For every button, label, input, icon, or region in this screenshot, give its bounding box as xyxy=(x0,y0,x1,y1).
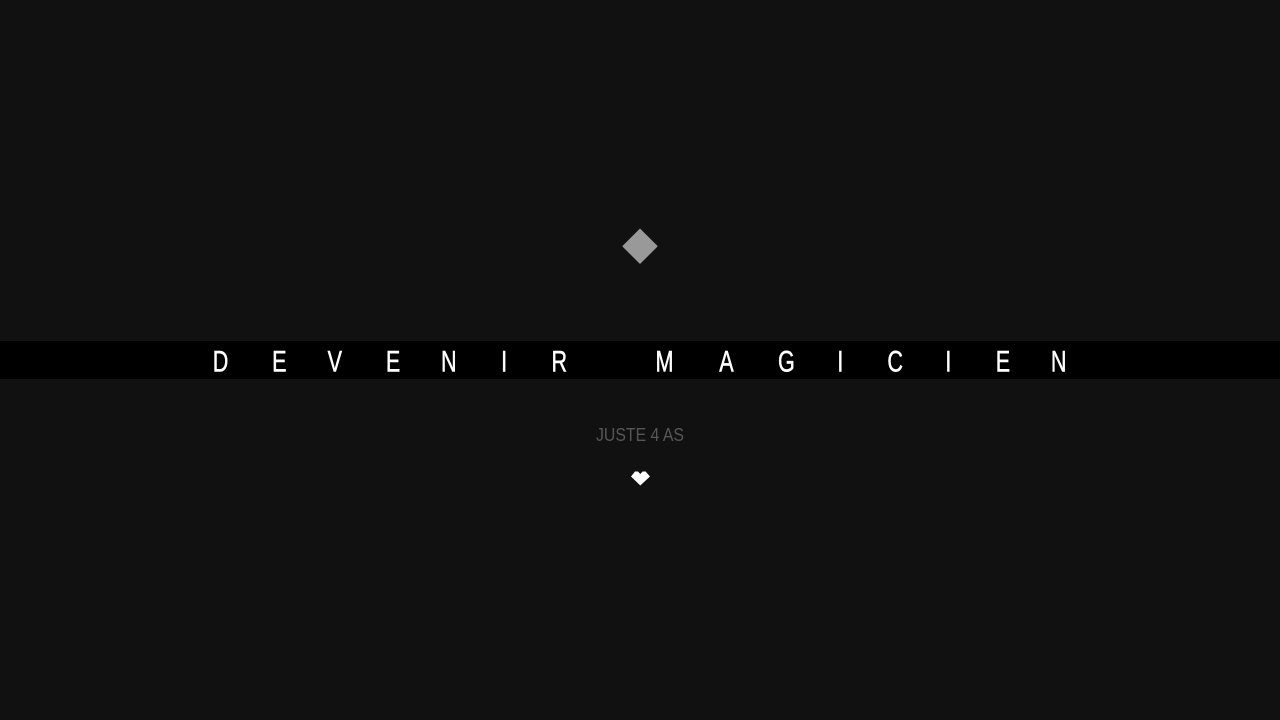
icon: grey diamond xyxy=(622,228,658,264)
subtitle: JUSTE 4 AS xyxy=(596,425,684,445)
icon: white heart xyxy=(631,472,650,486)
title: DEVENIR MAGICIEN xyxy=(213,344,1066,378)
title band xyxy=(0,341,1280,379)
